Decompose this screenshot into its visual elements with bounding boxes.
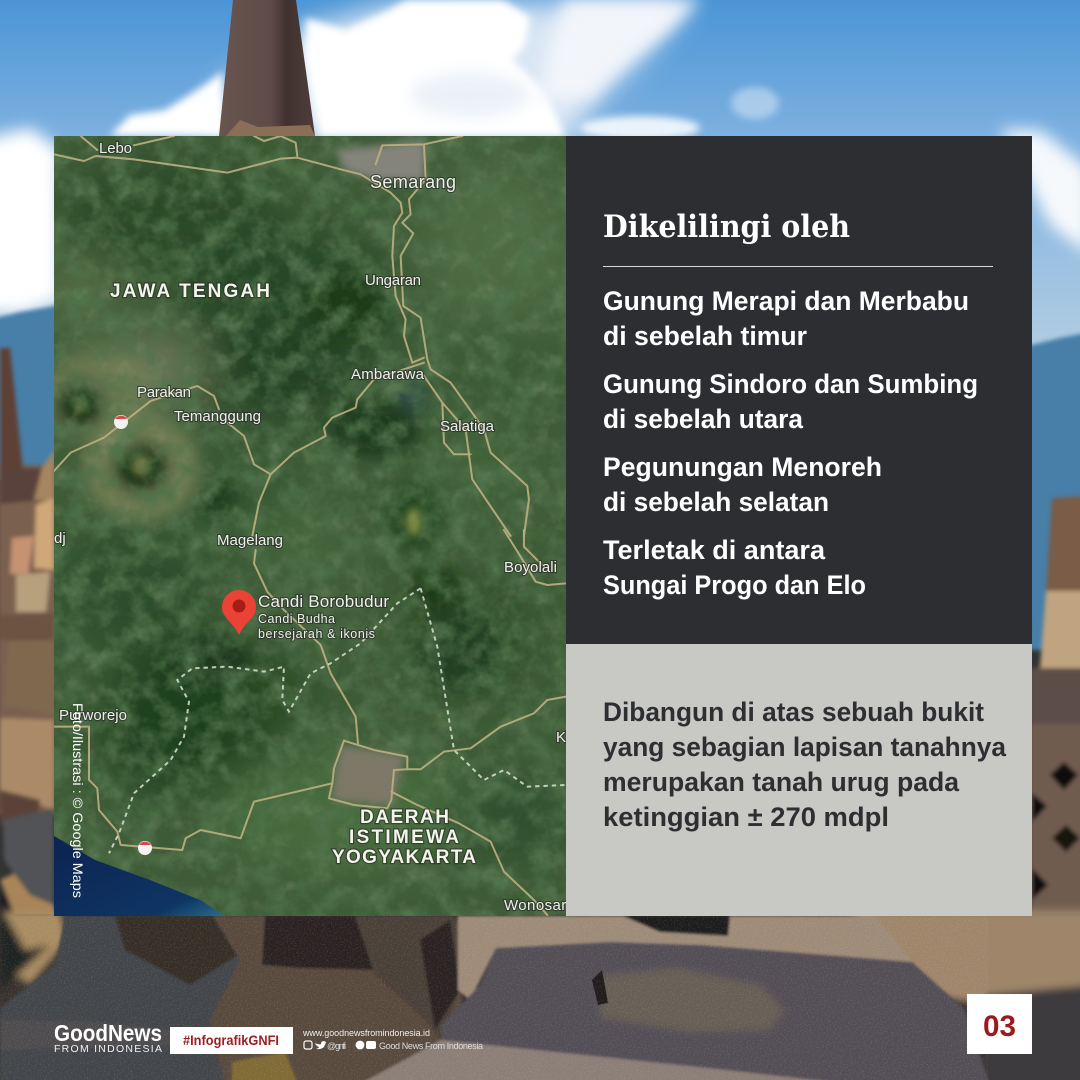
icon: facebook <box>356 1041 364 1049</box>
road shields <box>114 415 152 855</box>
list item: rivers <box>603 535 866 600</box>
place labels: dj <box>54 530 66 547</box>
location label: Candi Borobudur: bersejarah & ikonis <box>258 627 375 641</box>
page number: 03 <box>983 1010 1016 1043</box>
list item: Menoreh: Pegunungan Menoreh <box>603 452 882 482</box>
body text <box>603 697 1007 832</box>
panel: elevation note <box>566 644 1032 916</box>
icon: youtube <box>366 1041 376 1049</box>
list item: Sindoro and Sumbing: Gunung Sindoro dan Sumbing <box>603 369 978 399</box>
place labels: ISTIMEWA <box>349 827 459 848</box>
list item: Menoreh <box>603 452 882 517</box>
place labels: Ungaran <box>365 272 421 289</box>
stupa spire <box>219 0 315 136</box>
list item: Sindoro and Sumbing: di sebelah utara <box>603 404 804 434</box>
place labels: YOGYAKARTA <box>332 847 476 868</box>
location label: Candi Borobudur: Candi Borobudur <box>258 592 389 611</box>
place labels: Salatiga <box>440 418 495 435</box>
clouds <box>0 0 1080 314</box>
body text: Dibangun di atas sebuah bukit <box>603 697 984 727</box>
list item: Menoreh: di sebelah selatan <box>603 487 829 517</box>
icon: instagram <box>304 1041 312 1049</box>
place labels: Magelang <box>217 532 283 549</box>
text: gnfi handle: @gnfi <box>327 1041 346 1051</box>
location label: Candi Borobudur <box>258 592 389 641</box>
photo credit: Foto/Ilustrasi : © Google Maps <box>70 703 86 898</box>
mountains <box>0 305 1080 650</box>
place labels: DAERAH <box>360 807 449 828</box>
list item: rivers: Sungai Progo dan Elo <box>603 570 866 600</box>
place labels: Purworejo <box>59 707 127 724</box>
place labels: Lebo <box>99 140 132 157</box>
footer contact line <box>302 1028 483 1051</box>
list item: Merapi and Merbabu: di sebelah timur <box>603 321 807 351</box>
stones foreground <box>0 905 1080 1080</box>
left temple <box>0 348 58 970</box>
list item: Sindoro and Sumbing <box>603 369 978 434</box>
sky <box>0 0 1080 360</box>
icon: twitter <box>315 1041 326 1049</box>
right temple <box>1030 496 1080 924</box>
place labels <box>54 140 570 914</box>
footer contact line: www.goodnewsfromindonesia.id <box>302 1028 430 1038</box>
list item: rivers: Terletak di antara <box>603 535 826 565</box>
place labels: JAWA TENGAH <box>110 281 270 302</box>
place labels: K <box>556 729 566 746</box>
body text: merupakan tanah urug pada <box>603 767 960 797</box>
place labels: Ambarawa <box>351 366 425 383</box>
dashed boundaries <box>109 588 566 853</box>
terrain <box>40 136 580 916</box>
place labels: Wonosari <box>504 897 570 914</box>
hashtag tag: #InfografikGNFI <box>183 1033 279 1048</box>
sea <box>54 836 232 920</box>
body text: yang sebagian lapisan tanahnya <box>603 732 1007 762</box>
body text: ketinggian ± 270 mdpl <box>603 802 889 832</box>
heading: Dikelilingi oleh <box>603 209 850 245</box>
place labels: Parakan <box>137 384 191 401</box>
location pin: Candi Borobudur <box>222 590 256 635</box>
city areas <box>332 140 425 805</box>
footer logo: GoodNews from Indonesia: FROM INDONESIA <box>54 1043 162 1055</box>
hashtag tag <box>170 1027 293 1054</box>
text: channel name: Good News From Indonesia <box>379 1041 483 1051</box>
roads <box>54 136 529 536</box>
location label: Candi Borobudur: Candi Budha <box>258 612 335 626</box>
place labels: Boyolali <box>504 559 557 576</box>
list item: Merapi and Merbabu <box>603 286 969 351</box>
page number <box>967 994 1032 1054</box>
footer logo: GoodNews from Indonesia <box>54 1020 162 1055</box>
place labels: Temanggung <box>174 408 261 425</box>
footer logo: GoodNews from Indonesia: GoodNews <box>54 1020 162 1046</box>
map panel: satellite view of Central Java <box>40 136 580 920</box>
panel: Dikelilingi oleh <box>566 136 1032 644</box>
place labels: Semarang <box>370 172 456 192</box>
list item: Merapi and Merbabu: Gunung Merapi dan Merbabu <box>603 286 969 316</box>
